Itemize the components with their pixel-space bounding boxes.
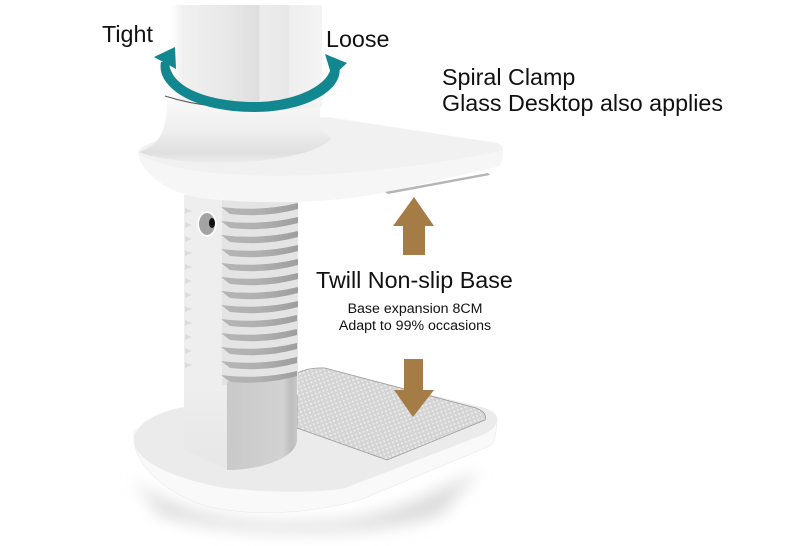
heading: glass desktop: Glass Desktop also applies xyxy=(442,90,723,116)
arrow: down xyxy=(394,359,434,417)
clamp base plate xyxy=(134,368,497,513)
plate body xyxy=(138,117,503,202)
left thread teeth xyxy=(185,208,192,368)
right thread ridges xyxy=(221,203,298,383)
screw hole xyxy=(198,211,216,237)
caption: occasions: Adapt to 99% occasions xyxy=(339,318,491,334)
lower column right xyxy=(227,372,297,470)
caption: expansion: Base expansion 8CM xyxy=(348,301,482,317)
main column xyxy=(170,5,322,110)
collar seam xyxy=(165,96,215,106)
upper column body xyxy=(184,195,298,395)
twill strip xyxy=(385,173,490,194)
label: Tight: Tight xyxy=(102,21,153,47)
base shadow xyxy=(125,470,480,532)
plate edge xyxy=(134,420,497,513)
threaded screw column xyxy=(184,195,298,470)
plate top xyxy=(134,368,497,492)
rotation arrow xyxy=(154,47,347,112)
heading: twill base: Twill Non-slip Base xyxy=(316,267,513,293)
spiral collar xyxy=(139,100,332,163)
lower column left xyxy=(184,385,228,470)
heading: spiral clamp: Spiral Clamp xyxy=(442,64,575,90)
non-slip pad xyxy=(297,368,486,460)
plate top surface xyxy=(138,117,503,176)
thread background xyxy=(222,200,298,390)
label: Loose: Loose xyxy=(326,26,389,52)
top clamp plate xyxy=(138,117,503,202)
arrow: up xyxy=(393,197,434,255)
